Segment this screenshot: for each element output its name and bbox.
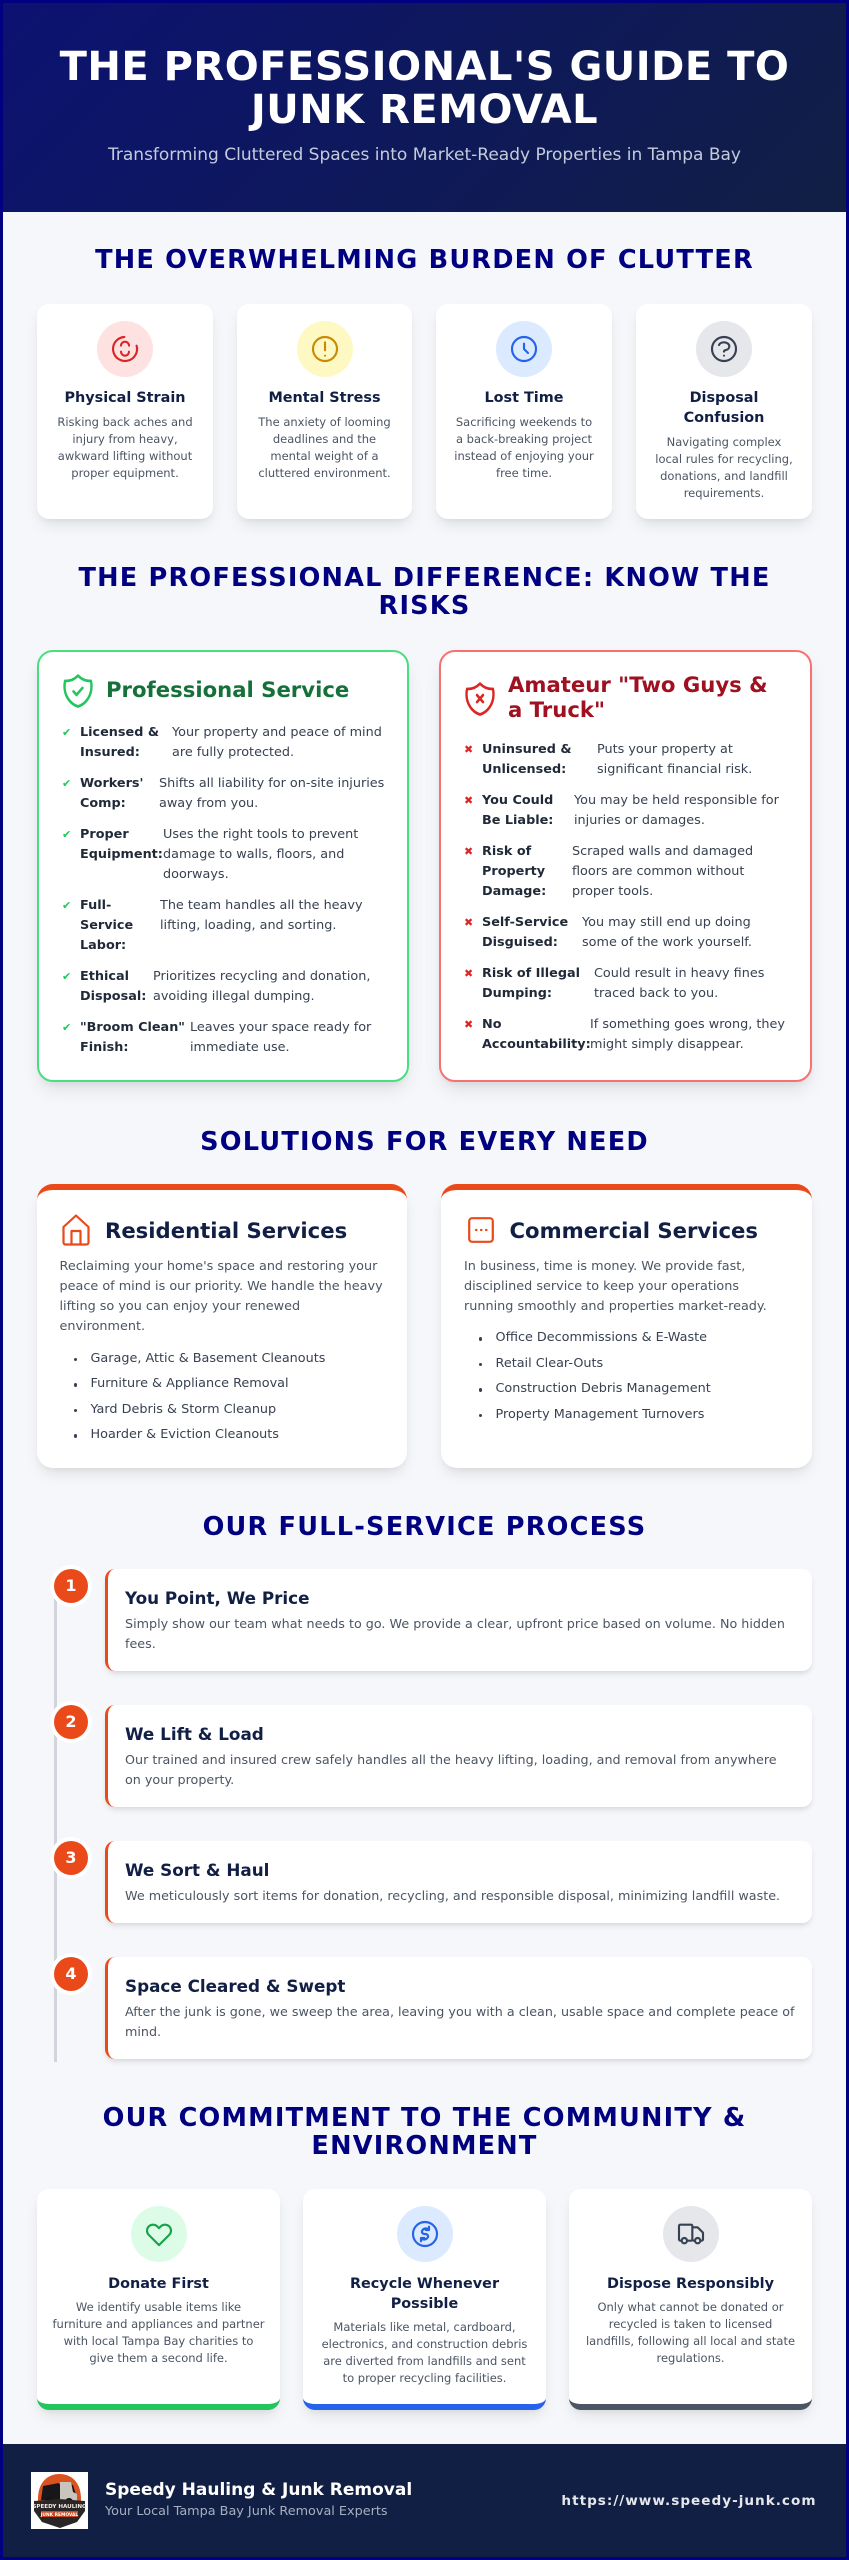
logo: SPEEDY HAULING	[32, 2504, 87, 2510]
panel: professional service: ✔	[62, 899, 71, 912]
card title: Mental Stress	[268, 390, 381, 406]
panel title: Amateur "Two Guys &	[508, 672, 768, 697]
card text	[258, 415, 391, 480]
panel title	[508, 672, 768, 722]
panel: professional service: Comp:	[80, 796, 126, 811]
panel text: In business, time is money. We provide fast,	[464, 1259, 745, 1274]
step 4 number: 4	[65, 1964, 77, 1983]
card title: Disposal	[690, 390, 758, 406]
panel: professional service: damage to walls, floors, and	[163, 847, 344, 862]
panel: amateur: Risk of Illegal	[482, 966, 580, 981]
panel: professional service: Your property and peace of mind	[172, 725, 382, 740]
service list: Hoarder & Eviction Cleanouts	[90, 1427, 279, 1442]
panel title: Professional Service	[106, 677, 349, 702]
item: uninsured	[464, 742, 752, 777]
icon: house	[62, 1214, 90, 1246]
card text: give them a second life.	[89, 2351, 228, 2365]
step text: mind.	[125, 2024, 161, 2039]
card text: requirements.	[684, 486, 764, 500]
panel: amateur: No	[482, 1017, 502, 1032]
panel: amateur: Unlicensed:	[482, 762, 566, 777]
card title	[350, 2276, 500, 2312]
panel: amateur	[439, 650, 812, 1082]
card text	[454, 415, 594, 480]
card text: We identify usable items like	[76, 2300, 241, 2314]
panel: professional service: away from you.	[159, 796, 258, 811]
step text: Our trained and insured crew safely handles all the heavy lifting, loading, and removal from anywhere	[125, 1752, 777, 1767]
item: equipment	[62, 827, 358, 882]
panel: dispose	[569, 2189, 812, 2410]
panel: amateur: ✖	[464, 743, 473, 756]
panel: amateur: significant financial risk.	[597, 762, 752, 777]
item: licensed	[62, 725, 382, 760]
card title: Dispose Responsibly	[607, 2276, 774, 2292]
card text: a back-breaking project	[456, 432, 592, 446]
icon: truck	[662, 2206, 718, 2262]
card text: local rules for recycling,	[655, 452, 793, 466]
panel: mental stress	[237, 304, 412, 519]
card text: deadlines and the	[273, 432, 376, 446]
icon: shield x	[465, 682, 495, 716]
panel: professional service: ✔	[62, 828, 71, 841]
panel: amateur: Self-Service	[482, 915, 568, 930]
heading: professional difference: RISKS	[379, 591, 470, 621]
logo: JUNK REMOVAL	[40, 2512, 78, 2518]
card text: Materials like metal, cardboard,	[333, 2320, 516, 2334]
footer	[0, 2444, 849, 2560]
panel: amateur: ✖	[464, 1018, 473, 1031]
service list	[74, 1350, 325, 1442]
step 3 card	[105, 1841, 812, 1923]
panel: professional service: Uses the right tools to prevent	[163, 827, 358, 842]
panel text: peace of mind is our priority. We handle the heavy	[60, 1279, 383, 1294]
card text: Navigating complex	[667, 435, 781, 449]
panel: amateur: floors are common without	[572, 864, 744, 879]
panel: amateur: If something goes wrong, they	[590, 1017, 785, 1032]
card text	[52, 2300, 265, 2365]
item: accountability	[464, 1017, 785, 1052]
heading: process: OUR FULL-SERVICE PROCESS	[203, 1512, 646, 1542]
step text: After the junk is gone, we sweep the area, leaving you with a clean, usable space and complete peace of	[125, 2004, 795, 2019]
item: broom clean	[62, 1020, 372, 1055]
panel: professional service: doorways.	[163, 867, 229, 882]
card text	[655, 435, 793, 500]
heading: commitment: ENVIRONMENT	[311, 2131, 538, 2161]
subtitle: Transforming Cluttered Spaces into Market-Ready Properties in Tampa Bay	[108, 145, 741, 165]
tagline: Your Local Tampa Bay Junk Removal Experts	[105, 2504, 388, 2518]
icon: clock	[496, 321, 552, 377]
panel: professional service	[37, 650, 409, 1082]
panel: professional service: Workers'	[80, 776, 143, 791]
panel: amateur: some of the work yourself.	[582, 935, 752, 950]
company name: Speedy Hauling & Junk Removal	[105, 2480, 412, 2500]
title	[60, 44, 789, 132]
item: property damage	[464, 844, 753, 899]
heading: professional difference	[78, 563, 771, 621]
panel: professional service: are fully protected.	[172, 745, 294, 760]
card text: Sacrificing weekends to	[456, 415, 592, 429]
icon: building	[468, 1217, 494, 1243]
step 2 number	[54, 1705, 88, 1739]
card text: instead of enjoying your	[454, 449, 594, 463]
card text: landfills, following all local and state	[586, 2334, 795, 2348]
panel: professional service: avoiding illegal dumping.	[153, 989, 315, 1004]
step 2 card	[105, 1705, 812, 1807]
panel text: disciplined service to keep your operations	[464, 1279, 739, 1294]
service list: Furniture & Appliance Removal	[90, 1376, 289, 1391]
icon: heart	[130, 2206, 186, 2262]
panel: professional service: ✔	[62, 726, 71, 739]
panel: professional service: Service	[80, 918, 133, 933]
panel: professional service: Insured:	[80, 745, 140, 760]
panel: lost time	[436, 304, 612, 519]
step title: We Sort & Haul	[125, 1860, 269, 1880]
step text: on your property.	[125, 1772, 234, 1787]
step text	[125, 2004, 795, 2039]
panel: amateur: ✖	[464, 916, 473, 929]
step text: Simply show our team what needs to go. We provide a clear, upfront price based on volume. No hidden	[125, 1616, 785, 1631]
step title: You Point, We Price	[125, 1588, 310, 1608]
panel text: Reclaiming your home's space and restoring your	[60, 1259, 377, 1274]
item: ethical disposal	[62, 969, 370, 1004]
step 1 number: 1	[65, 1576, 77, 1595]
service list: Retail Clear-Outs	[496, 1356, 603, 1370]
panel: donate first	[37, 2189, 280, 2410]
card title: Possible	[391, 2296, 458, 2312]
step 2 number: 2	[65, 1712, 77, 1731]
service list: Property Management Turnovers	[496, 1406, 704, 1422]
card text	[586, 2300, 795, 2365]
panel: amateur: Be Liable:	[482, 813, 553, 828]
header banner	[0, 0, 849, 212]
step title: We Lift & Load	[125, 1724, 264, 1744]
item: illegal dumping	[464, 966, 764, 1001]
title: JUNK REMOVAL	[251, 86, 598, 132]
card text: Only what cannot be donated or	[597, 2300, 784, 2314]
panel title: a Truck"	[508, 697, 605, 722]
card text	[57, 415, 193, 480]
panel: amateur: ✖	[464, 845, 473, 858]
step 4 number	[54, 1957, 88, 1991]
panel: professional service: ✔	[62, 1021, 71, 1034]
card title: Confusion	[684, 410, 764, 426]
card text: recycled is taken to licensed	[609, 2317, 772, 2331]
panel text	[60, 1259, 383, 1334]
process timeline line	[54, 1590, 57, 2062]
panel text: lifting so you can enjoy your renewed	[60, 1299, 300, 1314]
panel: amateur: Scraped walls and damaged	[572, 844, 753, 859]
panel: professional service: Proper	[80, 827, 129, 842]
card text: injury from heavy,	[72, 432, 178, 446]
service list: Construction Debris Management	[496, 1381, 711, 1396]
panel: amateur: proper tools.	[572, 884, 653, 899]
panel: amateur: Risk of	[482, 844, 531, 859]
heading: commitment	[103, 2102, 746, 2161]
panel: professional service: lifting, loading, and sorting.	[160, 918, 336, 933]
panel text: running smoothly and properties market-ready.	[464, 1299, 767, 1314]
card text: are diverted from landfills and sent	[323, 2354, 526, 2368]
heading: commitment: OUR COMMITMENT TO THE COMMUNITY &	[103, 2102, 746, 2132]
card title	[684, 390, 764, 426]
panel title: Residential Services	[105, 1218, 347, 1243]
card text: proper equipment.	[71, 466, 179, 480]
item: workers comp	[62, 776, 384, 811]
step text: We meticulously sort items for donation, recycling, and responsible disposal, minimizing landfill waste.	[125, 1888, 780, 1903]
title: THE PROFESSIONAL'S GUIDE TO	[60, 44, 789, 90]
heading: burden of clutter: THE OVERWHELMING BURDEN OF CLUTTER	[95, 245, 754, 275]
panel title: Commercial Services	[510, 1218, 758, 1243]
card text: free time.	[496, 466, 552, 480]
icon: physical strain	[97, 321, 153, 377]
card text: awkward lifting without	[58, 449, 192, 463]
heading: professional difference: THE PROFESSIONAL DIFFERENCE: KNOW THE	[78, 563, 771, 593]
website url: https://www.speedy-junk.com	[561, 2493, 816, 2509]
card text: The anxiety of looming	[258, 415, 391, 429]
card text: donations, and landfill	[660, 469, 788, 483]
icon: exclamation	[296, 321, 352, 377]
panel: amateur: Puts your property at	[597, 742, 733, 757]
panel: professional service: immediate use.	[190, 1040, 290, 1055]
panel: amateur: might simply disappear.	[590, 1037, 744, 1052]
panel: amateur: You Could	[482, 793, 553, 808]
card title: Recycle Whenever	[350, 2276, 499, 2292]
step 4 card	[105, 1957, 812, 2059]
card text: electronics, and construction debris	[322, 2337, 527, 2351]
icon: recycle	[396, 2206, 452, 2262]
card text: Risking back aches and	[57, 415, 193, 429]
step text	[125, 1616, 785, 1651]
panel: professional service: "Broom Clean"	[80, 1020, 185, 1035]
panel: professional service: Finish:	[80, 1040, 128, 1055]
panel: residential services	[37, 1184, 407, 1468]
panel: amateur: Disguised:	[482, 935, 558, 950]
panel: professional service: Leaves your space ready for	[190, 1020, 371, 1035]
panel: amateur: injuries or damages.	[574, 813, 705, 828]
panel: amateur: Accountability:	[482, 1037, 591, 1052]
item: labor	[62, 898, 363, 953]
panel: disposal confusion	[636, 304, 812, 519]
panel: physical strain	[37, 304, 213, 519]
panel: amateur: Uninsured &	[482, 742, 572, 757]
card text: mental weight of a	[270, 449, 379, 463]
card title: Physical Strain	[64, 390, 186, 406]
panel: amateur: Property	[482, 864, 545, 879]
logo	[31, 2472, 88, 2529]
panel: professional service: Equipment:	[80, 847, 163, 862]
panel: professional service: Prioritizes recycling and donation,	[153, 969, 370, 984]
panel: recycle	[303, 2189, 546, 2410]
panel: professional service: The team handles all the heavy	[160, 898, 363, 913]
icon: question mark	[696, 321, 752, 377]
card text: cluttered environment.	[258, 466, 391, 480]
panel: amateur: Damage:	[482, 884, 546, 899]
step 3 number	[54, 1841, 88, 1875]
panel text: environment.	[60, 1319, 145, 1334]
card title: Donate First	[108, 2276, 209, 2292]
panel: amateur: You may still end up doing	[582, 915, 751, 930]
panel: commercial services	[441, 1184, 812, 1468]
panel: professional service: Full-	[80, 898, 111, 913]
service list: Garage, Attic & Basement Cleanouts	[90, 1350, 325, 1366]
panel: professional service: ✔	[62, 777, 71, 790]
panel: amateur: You may be held responsible for	[574, 793, 779, 808]
panel: professional service: Licensed &	[80, 725, 159, 740]
panel: professional service: Ethical	[80, 969, 129, 984]
panel: professional service: Shifts all liability for on-site injuries	[159, 776, 384, 791]
service list: Yard Debris & Storm Cleanup	[90, 1402, 276, 1416]
card title: Lost Time	[484, 390, 564, 406]
step text	[125, 1752, 777, 1787]
panel: amateur: ✖	[464, 794, 473, 807]
card text	[322, 2320, 527, 2385]
panel: amateur: ✖	[464, 967, 473, 980]
step text: fees.	[125, 1636, 156, 1651]
icon: shield check	[63, 674, 93, 708]
step 1 card	[105, 1569, 812, 1671]
panel: amateur: traced back to you.	[594, 986, 718, 1001]
card text: regulations.	[656, 2351, 725, 2365]
step title: Space Cleared & Swept	[125, 1976, 345, 1996]
card text: furniture and appliances and partner	[52, 2317, 265, 2331]
panel: professional service: Labor:	[80, 938, 126, 953]
panel: amateur: Could result in heavy fines	[594, 966, 764, 981]
panel: professional service: ✔	[62, 970, 71, 983]
service list	[479, 1330, 711, 1422]
item: self-service	[464, 915, 752, 950]
panel: professional service: Disposal:	[80, 989, 146, 1004]
panel: amateur: Dumping:	[482, 986, 552, 1001]
item: liable	[464, 793, 779, 828]
step 3 number: 3	[65, 1848, 77, 1867]
step 1 number	[54, 1569, 88, 1603]
card text: with local Tampa Bay charities to	[64, 2334, 253, 2348]
heading: solutions: SOLUTIONS FOR EVERY NEED	[200, 1126, 649, 1156]
card text: to proper recycling facilities.	[343, 2371, 506, 2385]
panel text	[464, 1259, 767, 1314]
service list: Office Decommissions & E-Waste	[496, 1330, 707, 1345]
